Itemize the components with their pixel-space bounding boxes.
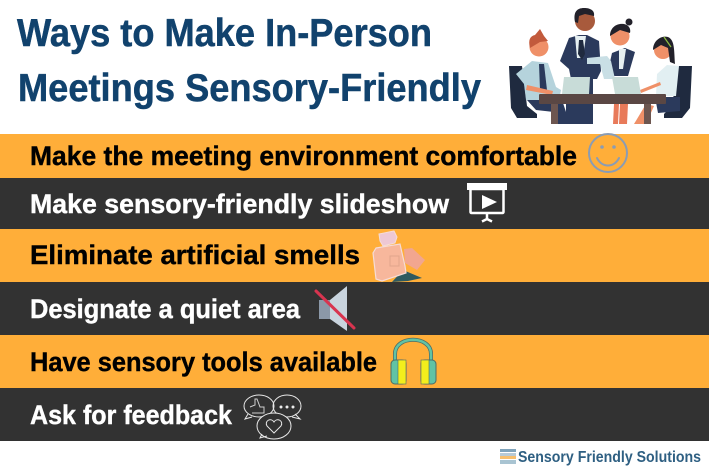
icon: smiley face: [589, 134, 627, 172]
papers: [587, 56, 615, 79]
panel: quiet area: [0, 282, 709, 335]
icon: presentation screen: [467, 183, 507, 222]
standing man: [560, 35, 601, 79]
panel: slideshow: [0, 178, 709, 229]
text: item 2: Make sensory-friendly slideshow: [30, 189, 450, 219]
text: item 1: Make the meeting environment comfortable: [30, 141, 577, 171]
chairs: [509, 66, 692, 118]
title: [17, 12, 481, 110]
laptops: [562, 77, 641, 94]
woman right: [656, 65, 679, 96]
panel: artificial smells: [0, 229, 709, 282]
text: item 3: Eliminate artificial smells: [30, 240, 360, 270]
woman centre: [610, 48, 635, 76]
footer logo: [500, 449, 701, 466]
table: [539, 94, 666, 104]
text: item 4: Designate a quiet area: [30, 294, 301, 324]
icon: headphones: [391, 340, 436, 384]
title: Ways to Make In-Person: [17, 12, 432, 55]
icon: perfume bottle: [373, 231, 425, 282]
title: Meetings Sensory-Friendly: [18, 67, 481, 110]
panel: comfortable environment: [0, 134, 709, 178]
illustration: business meeting: [509, 8, 692, 124]
text: item 6: Ask for feedback: [30, 400, 233, 430]
text: item 5: Have sensory tools available: [30, 347, 377, 377]
panel: sensory tools: [0, 335, 709, 388]
left man: [516, 61, 561, 100]
icon: striped logo: [500, 449, 516, 464]
panel: feedback: [0, 388, 709, 441]
icon: feedback speech bubbles: [244, 395, 301, 439]
icon: muted speaker: [316, 286, 354, 331]
